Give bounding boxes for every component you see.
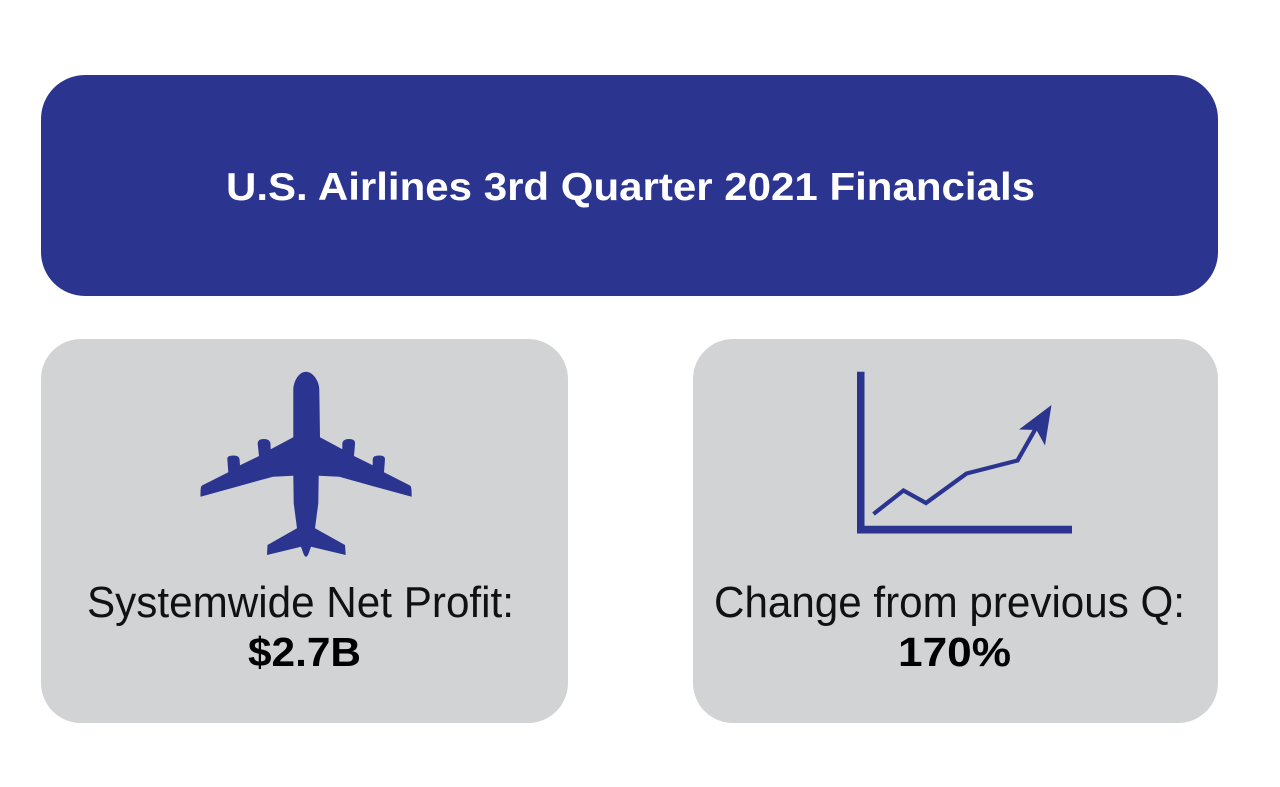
panel: change from previous quarter [693,339,1218,723]
value: $2.7B: $2.7B [248,629,361,675]
title banner [41,75,1218,296]
title: U.S. Airlines 3rd Quarter 2021 Financials [226,166,1035,209]
icon: airplane [200,372,412,557]
label: systemwide net profit: Systemwide Net Profit: [87,578,514,627]
label: change from previous Q: Change from previous Q: [714,578,1185,627]
value: 170%: 170% [898,629,1011,675]
icon: line chart with rising arrow [857,372,1072,534]
panel: systemwide net profit [41,339,568,723]
